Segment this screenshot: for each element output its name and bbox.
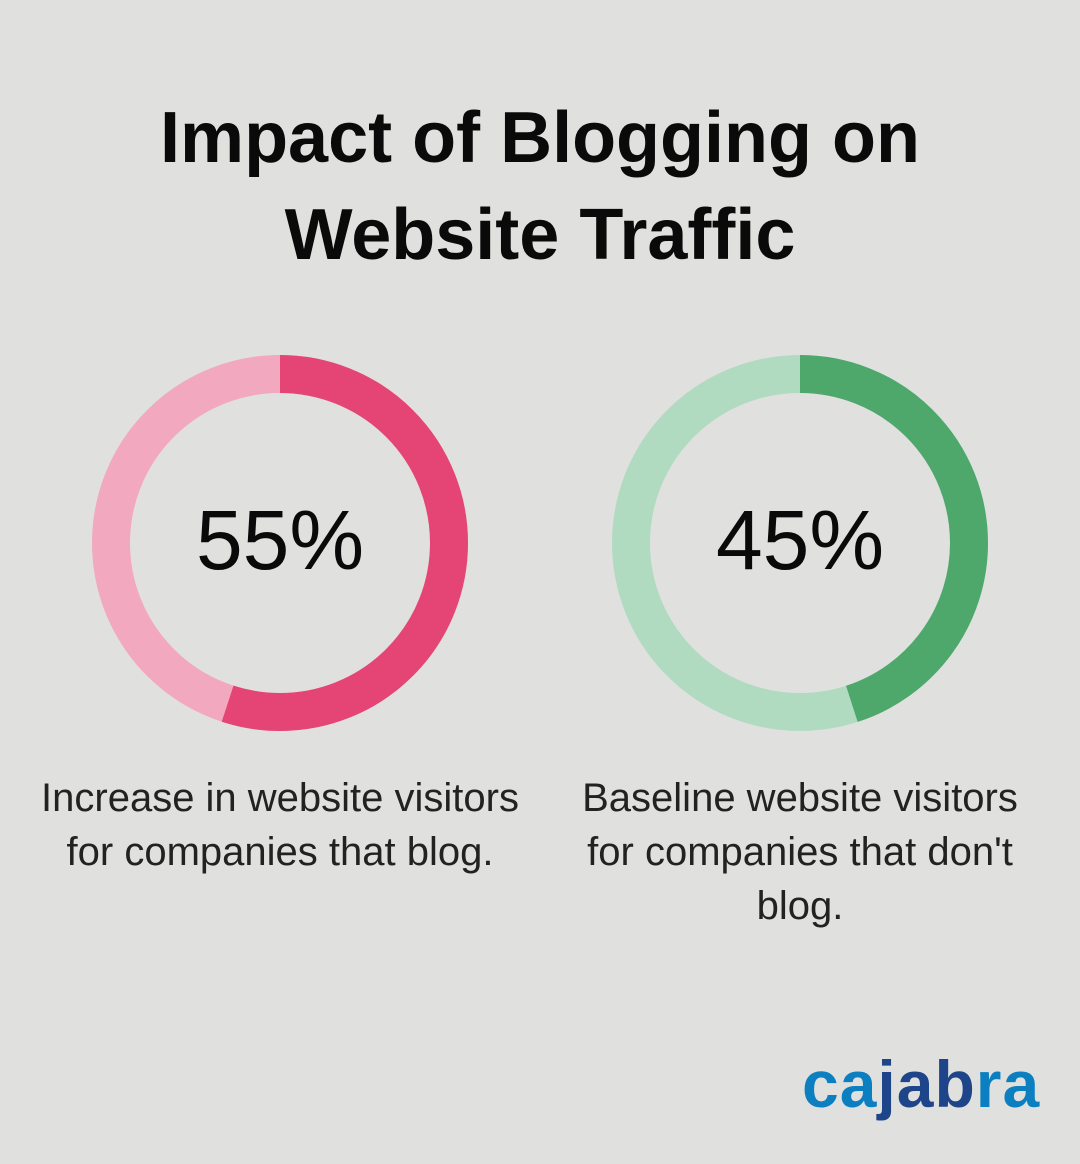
caption right <box>582 776 1018 928</box>
logo: cajabra <box>802 1047 1040 1121</box>
caption right: for companies that don't <box>587 830 1013 874</box>
stat 55%: 55% <box>196 493 364 587</box>
caption left: for companies that blog. <box>67 830 493 874</box>
caption left: Increase in website visitors <box>41 776 519 820</box>
stat 45%: 45% <box>716 493 884 587</box>
title: Website Traffic <box>285 195 795 275</box>
title: Impact of Blogging on <box>160 98 920 178</box>
donut: 55% <box>92 355 468 731</box>
caption left <box>41 776 519 874</box>
title <box>160 98 920 275</box>
caption right: Baseline website visitors <box>582 776 1018 820</box>
donut: 45% <box>612 355 988 731</box>
caption right: blog. <box>757 884 843 928</box>
